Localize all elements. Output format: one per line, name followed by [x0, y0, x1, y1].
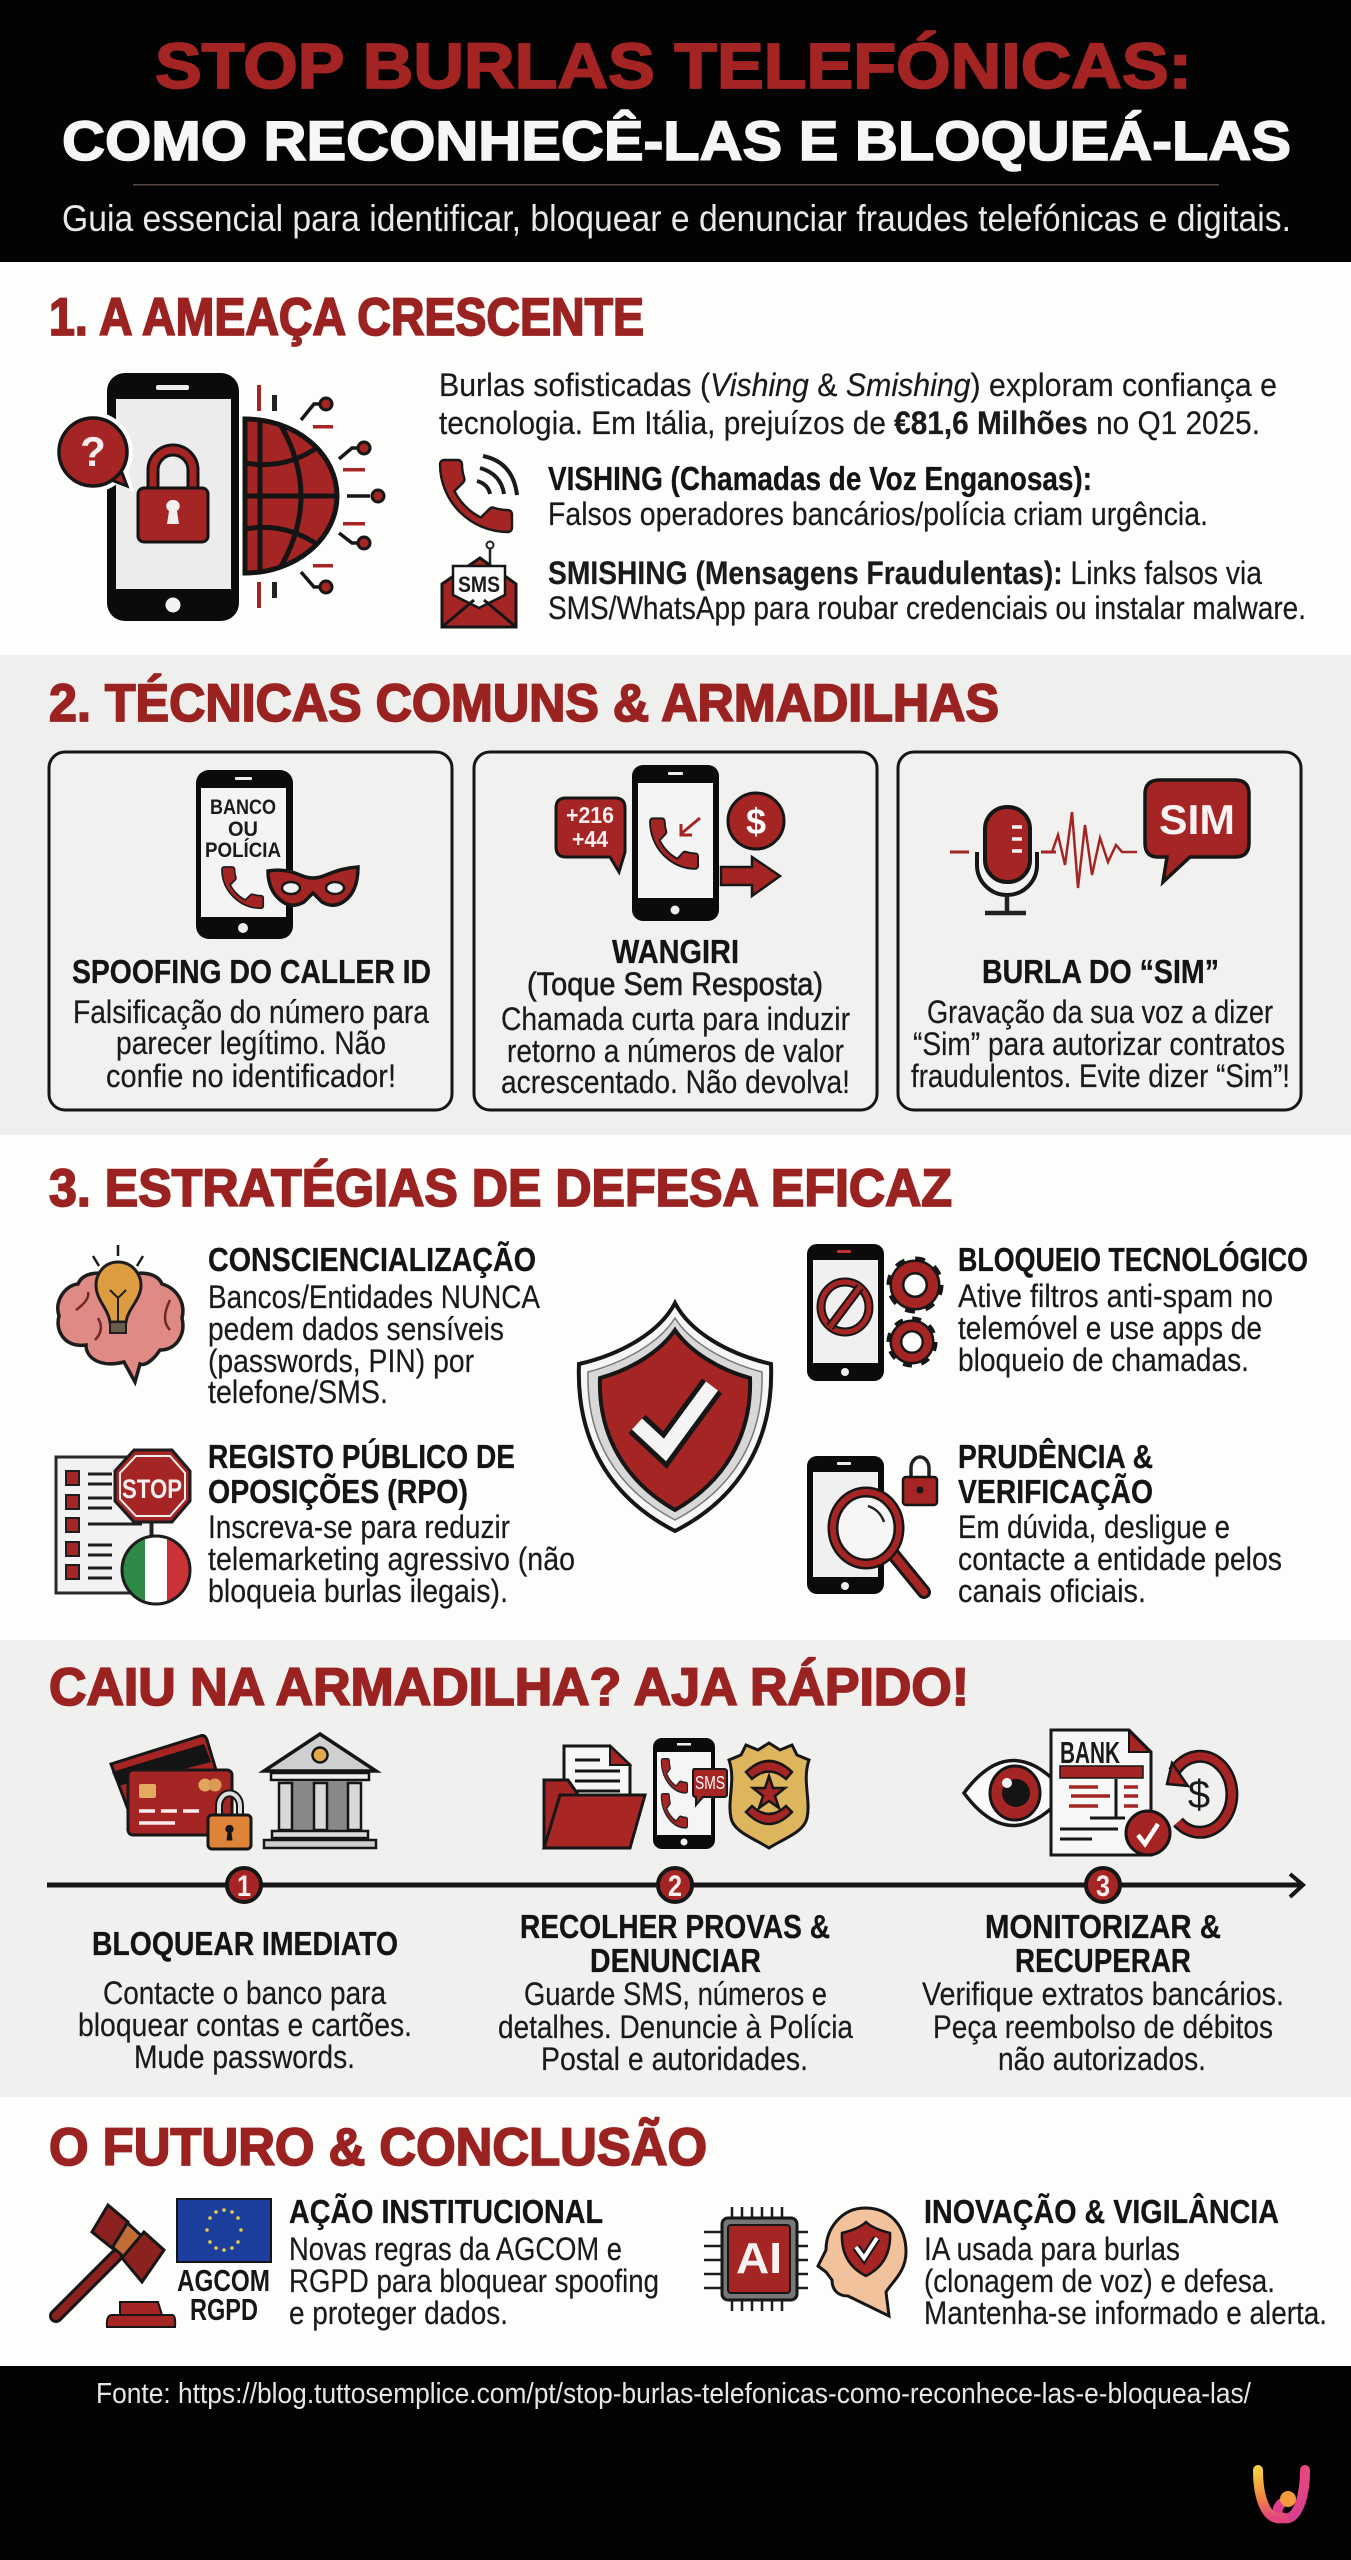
- vishing text: VISHING (Chamadas de Voz Enganosas):: [548, 460, 1092, 497]
- card title: BURLA DO “SIM”: [982, 953, 1219, 990]
- icon: bank statement: [1051, 1730, 1170, 1855]
- text: consciencialização: [208, 1241, 541, 1410]
- card: wangiri: [474, 752, 877, 1110]
- text: prudência: Em dúvida, desligue e: [958, 1509, 1230, 1545]
- icon: phone with mask: BANCO: [210, 796, 276, 819]
- agcom rgpd label: RGPD: [190, 2292, 258, 2327]
- text: rpo: Inscreva-se para reduzir: [208, 1509, 510, 1545]
- step 2 badge: 2: [668, 1870, 682, 1903]
- icon: refund arrow: [1167, 1756, 1232, 1832]
- card body: parecer legítimo. Não: [116, 1025, 386, 1061]
- icon: microphone and sim bubble: SIM: [1159, 796, 1235, 843]
- step 3 text: RECUPERAR: [1015, 1942, 1191, 1979]
- icon: phone with magnifier and lock: [807, 1456, 937, 1594]
- panel: estratégias de defesa: [49, 1158, 1308, 1609]
- card: burla do sim: [898, 752, 1301, 1110]
- smishing text: SMISHING (Mensagens Fraudulentas): Links falsos via: [548, 555, 1262, 591]
- panel: futuro e conclusão: [49, 2117, 1327, 2331]
- text: consciencialização: CONSCIENCIALIZAÇÃO: [208, 1241, 536, 1278]
- icon: head with shield: [818, 2208, 906, 2316]
- logo: [1258, 2470, 1305, 2518]
- timeline arrow: [47, 1874, 1303, 1897]
- step 1 badge: [227, 1868, 261, 1903]
- text: ação institucional: Novas regras da AGCOM e: [289, 2231, 622, 2267]
- text: prudência: PRUDÊNCIA &: [958, 1438, 1153, 1475]
- step 2 text: RECOLHER PROVAS &: [520, 1908, 830, 1945]
- icon: police badge: [729, 1743, 809, 1848]
- card title: [527, 933, 823, 1002]
- text: inovação: [924, 2193, 1327, 2331]
- card body: [911, 994, 1290, 1094]
- step 2 text: DENUNCIAR: [590, 1942, 761, 1979]
- text: inovação: (clonagem de voz) e defesa.: [924, 2263, 1275, 2299]
- step 2 text: Guarde SMS, números e: [524, 1976, 827, 2012]
- icon: phone with lock: [107, 373, 239, 621]
- icon: question bubble: ?: [80, 428, 106, 475]
- panel: caiu na armadilha: [47, 1657, 1303, 2077]
- vishing text: Falsos operadores bancários/polícia criam urgência.: [548, 496, 1208, 532]
- card body: [501, 1001, 850, 1100]
- icon: phone with evidence: SMS: [695, 1773, 725, 1793]
- text: rpo: REGISTO PÚBLICO DE: [208, 1438, 515, 1475]
- intro text: [439, 367, 1277, 441]
- heading: O FUTURO & CONCLUSÃO: [49, 2117, 707, 2177]
- icon: phone with evidence: [653, 1738, 727, 1849]
- icon: phone with mask: POLÍCIA: [205, 839, 281, 862]
- step 3 text: [922, 1908, 1284, 2077]
- text: prudência: [958, 1438, 1282, 1609]
- text: prudência: VERIFICAÇÃO: [958, 1473, 1153, 1510]
- step 3 text: Verifique extratos bancários.: [922, 1976, 1284, 2012]
- step 1 text: BLOQUEAR IMEDIATO: [92, 1925, 398, 1962]
- card body: retorno a números de valor: [507, 1033, 844, 1069]
- text: bloqueio tecnológico: telemóvel e use apps de: [958, 1310, 1262, 1346]
- vishing text: [548, 460, 1208, 532]
- step 3 badge: 3: [1096, 1870, 1110, 1903]
- text: bloqueio tecnológico: Ative filtros anti-spam no: [958, 1278, 1273, 1314]
- step 1 text: bloquear contas e cartões.: [78, 2007, 412, 2043]
- card title: WANGIRI: [612, 933, 739, 970]
- icon: shield with check: [579, 1303, 771, 1531]
- card body: acrescentado. Não devolva!: [501, 1064, 850, 1100]
- card body: [73, 994, 429, 1094]
- icon: stop list with italian flag: STOP: [122, 1474, 182, 1504]
- panel: a ameaça crescente: [49, 288, 1306, 627]
- step 1 text: Mude passwords.: [134, 2039, 355, 2075]
- icon: ai chip: [704, 2207, 808, 2311]
- icon: phone with gears: [807, 1244, 939, 1381]
- icon: phone with international numbers: $: [746, 801, 766, 842]
- step 2 text: Postal e autoridades.: [541, 2041, 808, 2077]
- text: consciencialização: telefone/SMS.: [208, 1374, 388, 1410]
- text: rpo: OPOSIÇÕES (RPO): [208, 1473, 468, 1510]
- panel: técnicas comuns: [49, 673, 1301, 1110]
- icon: phone with mask: OU: [228, 818, 258, 841]
- card body: “Sim” para autorizar contratos: [913, 1026, 1285, 1062]
- card body: Chamada curta para induzir: [501, 1001, 850, 1037]
- header: [62, 30, 1291, 239]
- card title: (Toque Sem Resposta): [527, 966, 823, 1002]
- text: ação institucional: AÇÃO INSTITUCIONAL: [289, 2193, 603, 2230]
- icon: sms envelope: [442, 542, 516, 627]
- icon: bank building: [264, 1734, 376, 1848]
- icon: refund arrow: $: [1188, 1773, 1210, 1817]
- source line: Fonte: https://blog.tuttosemplice.com/pt/stop-burlas-telefonicas-como-reconhece-las-e-bloquea-las/: [96, 2378, 1252, 2410]
- icon: eu flag: [177, 2199, 271, 2262]
- heading: 2. TÉCNICAS COMUNS & ARMADILHAS: [49, 673, 999, 733]
- heading: 1. A AMEAÇA CRESCENTE: [49, 288, 644, 347]
- text: bloqueio tecnológico: [958, 1241, 1308, 1378]
- text: rpo: bloqueia burlas ilegais).: [208, 1573, 508, 1609]
- text: prudência: contacte a entidade pelos: [958, 1541, 1282, 1577]
- agcom rgpd label: AGCOM: [177, 2263, 270, 2298]
- icon: folder with documents: [544, 1746, 645, 1848]
- step 3 text: Peça reembolso de débitos: [933, 2009, 1273, 2045]
- text: rpo: telemarketing agressivo (não: [208, 1541, 575, 1577]
- icon: sms envelope: SMS: [458, 572, 500, 597]
- card title: SPOOFING DO CALLER ID: [72, 953, 431, 990]
- heading: 3. ESTRATÉGIAS DE DEFESA EFICAZ: [49, 1158, 952, 1218]
- icon: question bubble: [53, 412, 134, 492]
- icon: microphone and sim bubble: [950, 780, 1249, 913]
- icon: phone with international numbers: +216: [566, 802, 614, 828]
- step 2 text: detalhes. Denuncie à Polícia: [498, 2009, 853, 2045]
- step 1 text: [78, 1925, 412, 2075]
- card body: confie no identificador!: [106, 1058, 396, 1094]
- agcom rgpd label: [177, 2263, 270, 2327]
- icon: phone with mask: [196, 770, 358, 939]
- icon: phone with international numbers: [556, 765, 784, 921]
- step 3 badge: [1086, 1868, 1120, 1903]
- step 2 text: [498, 1908, 853, 2077]
- intro text: tecnologia. Em Itália, prejuízos de €81,6 Milhões no Q1 2025.: [439, 405, 1260, 441]
- text: ação institucional: e proteger dados.: [289, 2295, 508, 2331]
- footer: [96, 2378, 1305, 2518]
- text: consciencialização: pedem dados sensíveis: [208, 1311, 504, 1347]
- icon: bank cards with lock: [111, 1736, 251, 1849]
- step 3 text: não autorizados.: [998, 2041, 1206, 2077]
- card body: fraudulentos. Evite dizer “Sim”!: [911, 1058, 1290, 1094]
- icon: stop list with italian flag: [56, 1450, 190, 1604]
- text: consciencialização: Bancos/Entidades NUNCA: [208, 1279, 541, 1315]
- step 2 badge: [658, 1868, 692, 1903]
- text: bloqueio tecnológico: bloqueio de chamadas.: [958, 1342, 1249, 1378]
- icon: phone call: [440, 456, 517, 532]
- icon: brain with light bulb: [58, 1245, 183, 1382]
- icon: ai chip: AI: [736, 2234, 782, 2283]
- card body: Falsificação do número para: [73, 994, 429, 1030]
- card body: Gravação da sua voz a dizer: [927, 994, 1273, 1030]
- icon: gavel: [56, 2205, 175, 2327]
- text: consciencialização: (passwords, PIN) por: [208, 1343, 474, 1379]
- title line 1: STOP BURLAS TELEFÓNICAS:: [155, 30, 1192, 102]
- icon: phone with international numbers: +44: [572, 826, 608, 852]
- text: prudência: canais oficiais.: [958, 1573, 1146, 1609]
- text: inovação: INOVAÇÃO & VIGILÂNCIA: [924, 2193, 1279, 2230]
- icon: bank statement: BANK: [1060, 1735, 1120, 1770]
- intro text: Burlas sofisticadas (Vishing & Smishing) exploram confiança e: [439, 367, 1277, 403]
- step 1 badge: 1: [237, 1870, 251, 1903]
- text: ação institucional: [289, 2193, 659, 2331]
- step 3 text: MONITORIZAR &: [985, 1908, 1221, 1945]
- text: rpo: [208, 1438, 575, 1609]
- icon: eye: [964, 1760, 1066, 1826]
- card: spoofing: [49, 752, 452, 1110]
- text: inovação: IA usada para burlas: [924, 2231, 1180, 2267]
- step 1 text: Contacte o banco para: [103, 1975, 386, 2011]
- heading: CAIU NA ARMADILHA? AJA RÁPIDO!: [49, 1657, 969, 1717]
- smishing text: [548, 555, 1306, 626]
- title line 2: COMO RECONHECÊ-LAS E BLOQUEÁ-LAS: [62, 109, 1291, 172]
- icon: globe with circuits: [245, 385, 384, 608]
- text: ação institucional: RGPD para bloquear spoofing: [289, 2263, 659, 2299]
